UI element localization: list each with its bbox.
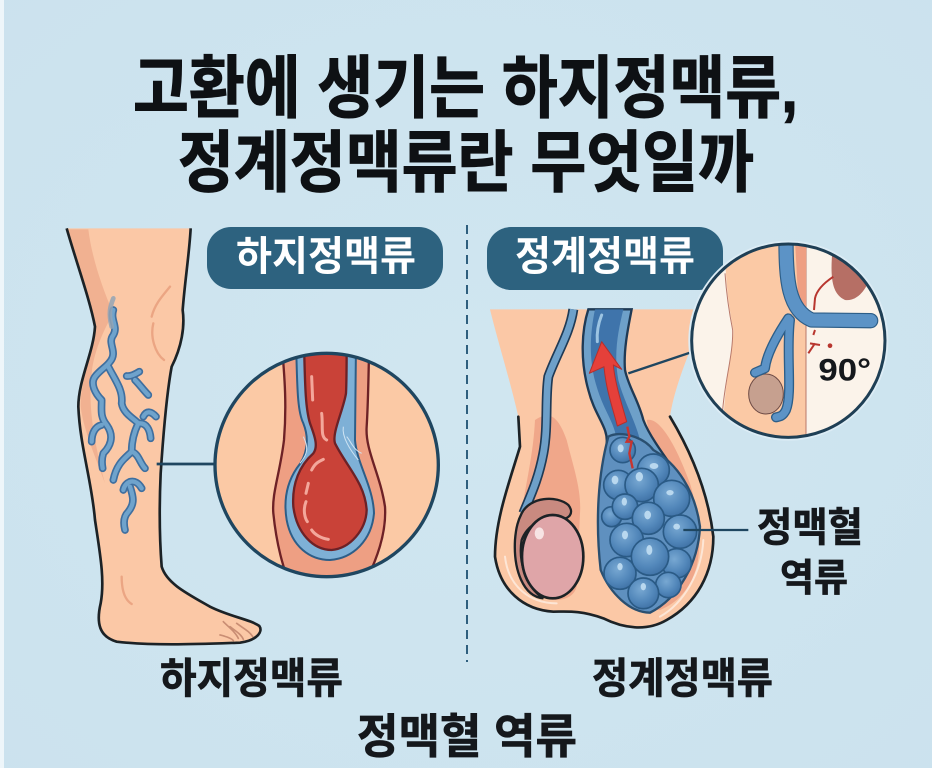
title: 고환에 생기는 하지정맥류, [133,51,798,127]
groin skin [490,309,713,627]
testis [749,374,783,414]
blood column [293,343,367,550]
varicose veins [92,310,156,530]
connector line: cluster to label [683,526,748,533]
pill heading: leg [207,227,443,289]
inner scrotal folds [517,415,580,600]
inset circle: 90 degree angle [688,240,888,443]
leg shading [68,229,113,483]
outer vessel wall [273,343,385,587]
reflux arrow [589,342,633,468]
magnified vein circle [215,343,438,587]
varicose vein cluster [598,434,700,613]
kidney [832,256,866,300]
label: venous reflux: 역류 [780,556,848,599]
title: 정계정맥류란 무엇일까 [178,126,754,201]
connector line: cord to inset [628,351,695,373]
panel: varicose vein of the leg [67,227,443,703]
vein wall [285,343,374,560]
pill heading: varicocele [487,227,723,290]
connector line [157,460,216,468]
toes [220,622,253,641]
caption: varicocele: 정계정맥류 [592,656,773,703]
blood spatter [808,277,833,353]
panel: varicocele [487,227,888,703]
label: venous reflux: 정맥혈 [757,505,863,549]
body skin [723,240,806,443]
spermatic cord vein [583,309,677,473]
leg fill [67,228,260,644]
vein highlights [612,444,680,590]
divider: dashed centre line [466,225,468,662]
leg outline [67,228,260,644]
caption: leg: 하지정맥류 [160,656,343,703]
pill heading: leg: 하지정맥류 [236,234,416,279]
scrotum outline [495,417,713,627]
testicular vein [755,240,871,417]
scrotum illustration [490,309,748,627]
left cord [523,309,573,513]
leg illustration [67,228,438,644]
label: venous reflux [757,505,863,599]
angle label: 90° [818,352,871,388]
title [133,51,798,201]
testis [515,499,583,598]
footer caption: 정맥혈 역류 [357,712,577,764]
pill heading: varicocele: 정계정맥류 [515,234,695,279]
